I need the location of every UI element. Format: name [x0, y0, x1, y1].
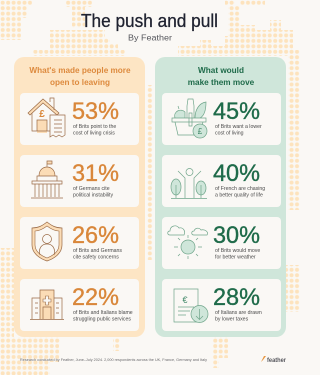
title: The push and pull: [81, 10, 218, 31]
card: safety concerns: [20, 217, 139, 269]
caption: cost of living crisis: [73, 130, 115, 136]
caption: of Italians are drawn: [215, 310, 262, 316]
statistic: 30%: 30%: [213, 222, 260, 249]
caption: [73, 124, 116, 136]
panel: what would make them move: [155, 57, 286, 337]
card: lower cost of living: [162, 93, 281, 145]
statistic: 45%: 45%: [213, 98, 260, 125]
statistic: 53%: 53%: [72, 98, 119, 125]
card: cost of living crisis: [20, 93, 139, 145]
card: lower taxes: [162, 279, 281, 331]
panel heading: leaving: [29, 66, 131, 87]
panel heading: leaving: open to leaving: [50, 78, 110, 87]
statistic: 28%: 28%: [213, 284, 260, 311]
caption: [73, 248, 122, 260]
caption: of Brits would move: [215, 248, 260, 254]
card: political instability: [20, 155, 139, 207]
panel heading: move: make them move: [188, 78, 255, 87]
caption: of Brits and Germans: [73, 248, 122, 254]
icon: shopping basket with pound: £: [198, 127, 203, 136]
caption: political instability: [73, 192, 113, 198]
statistic: 40%: 40%: [213, 160, 260, 187]
caption: a better quality of life: [215, 192, 263, 198]
panel: what's made people more open to leaving: [14, 57, 145, 337]
icon: euro document with down arrow: €: [182, 295, 188, 305]
panel heading: move: What would: [198, 66, 244, 75]
statistic: 26%: 26%: [72, 222, 119, 249]
icon: hospital: [30, 290, 64, 320]
icon: person with trees: [171, 168, 207, 198]
caption: of Germans cite: [73, 186, 110, 192]
card: public services: [20, 279, 139, 331]
logo: feather: [261, 356, 286, 364]
statistic: 22%: 22%: [72, 284, 119, 311]
caption: [73, 310, 133, 322]
subtitle: By Feather: [128, 32, 172, 42]
icon: house with pound and receipt: £: [39, 109, 45, 120]
panel heading: leaving: What's made people more: [29, 66, 131, 75]
caption: of Brits and Italians blame: [73, 310, 133, 316]
caption: by lower taxes: [215, 316, 249, 322]
icon: government building: [31, 161, 63, 198]
footnote: Research conducted by Feather, June–July 2024. 2,000 respondents across the UK, France, Germany and Italy: [20, 357, 207, 362]
caption: [215, 310, 262, 322]
caption: [215, 124, 262, 136]
caption: [73, 186, 113, 198]
logo: feather: feather: [267, 357, 286, 364]
panel heading: move: [188, 66, 255, 87]
icon: shield with person: [32, 222, 62, 261]
card: quality of life: [162, 155, 281, 207]
caption: struggling public services: [73, 316, 131, 322]
statistic: 31%: 31%: [72, 160, 119, 187]
card: better weather: [162, 217, 281, 269]
caption: cost of living: [215, 130, 244, 136]
caption: [215, 186, 265, 198]
caption: [215, 248, 260, 260]
caption: cite safety concerns: [73, 254, 119, 260]
caption: of French are chasing: [215, 186, 265, 192]
caption: for better weather: [215, 254, 256, 260]
icon: sun and clouds: [168, 226, 208, 259]
caption: of Brits point to the: [73, 124, 116, 130]
caption: of Brits want a lower: [215, 124, 262, 130]
